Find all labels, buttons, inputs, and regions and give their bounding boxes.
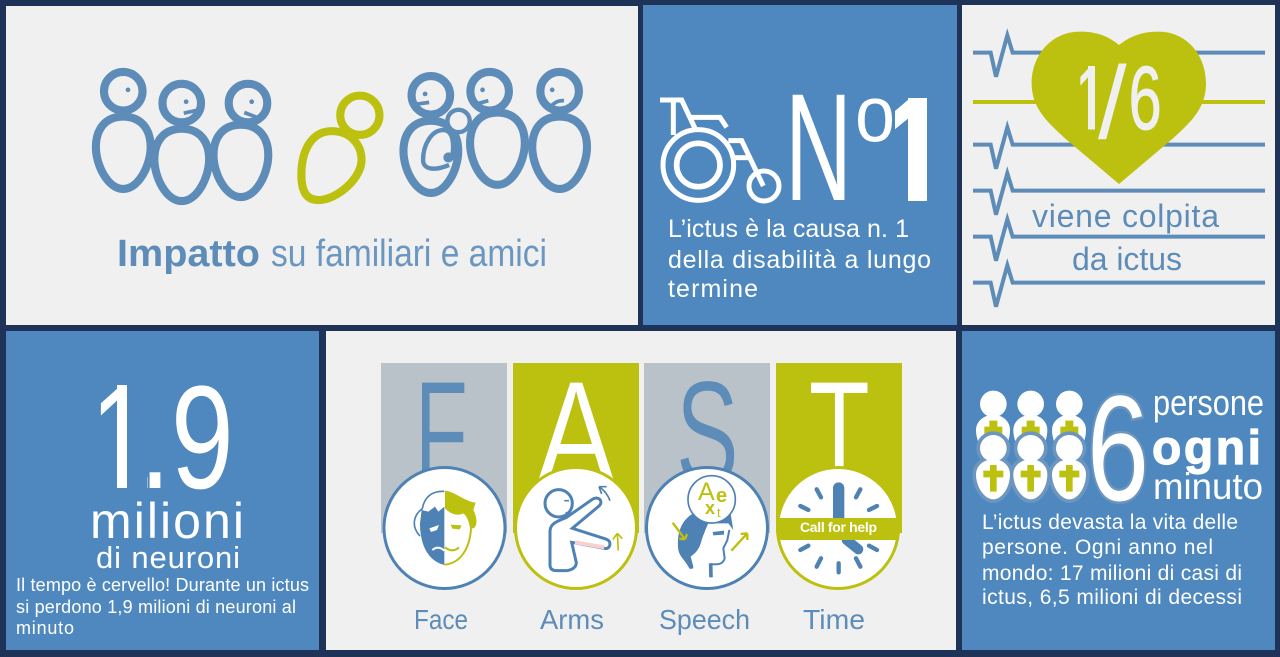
heading: Impatto su familiari e amici: su familiari e amici	[271, 233, 547, 275]
text: letters A e x t: e	[716, 485, 727, 507]
column: F Face	[381, 351, 507, 635]
text: paragraph about cases and deaths	[982, 511, 1242, 609]
text: persone ogni minuto	[1152, 382, 1264, 507]
icon: six people with crosses	[976, 391, 1086, 499]
panel: number one cause of disability	[643, 5, 957, 325]
text: neurons paragraph: si perdono 1,9 milioni di neuroni al	[16, 597, 296, 617]
text: neurons paragraph: minuto	[16, 618, 74, 638]
column: S Speech	[644, 351, 770, 635]
text: paragraph about cases and deaths: mondo: 17 milioni di casi di	[982, 562, 1242, 585]
text: letters A e x t	[698, 478, 727, 520]
text: disability description: della disabilità a lungo	[668, 246, 931, 274]
text: disability description	[668, 215, 931, 303]
column: S Speech: S	[676, 351, 739, 516]
text: 6: 6	[1087, 364, 1149, 532]
text: neurons paragraph: Il tempo è cervello! Durante un ictus	[16, 575, 309, 595]
banner: Call for help: Call for help	[800, 519, 877, 535]
text: letters A e x t: t	[717, 505, 721, 520]
column: T Time: T	[808, 351, 870, 516]
text: neurons paragraph	[16, 575, 309, 638]
column: F Face: F	[414, 351, 468, 516]
label: Arms: Arms	[540, 604, 604, 635]
text: paragraph about cases and deaths: L’ictus devasta la vita delle	[982, 511, 1238, 534]
chart icon: heartbeat lines	[973, 35, 1265, 307]
icon: raised arms	[545, 487, 622, 571]
heading: N° 1: 1	[883, 68, 945, 231]
text: paragraph about cases and deaths: persone. Ogni anno nel	[982, 536, 1213, 559]
text: milioni di neuroni	[90, 493, 244, 575]
text: disability description: L’ictus è la causa n. 1	[668, 215, 909, 243]
heading: Impatto su familiari e amici	[117, 233, 547, 275]
icon: group of people around the stroke patient	[96, 72, 587, 201]
panel: six people every minute	[962, 331, 1275, 650]
text: viene colpita da ictus	[1032, 198, 1219, 277]
icon: half sad, half smiling face	[414, 491, 476, 565]
panel: one in six	[962, 5, 1275, 325]
icon: clock	[800, 488, 877, 572]
text: viene colpita da ictus: da ictus	[1072, 241, 1182, 277]
panel: 1.9 million neurons	[6, 331, 319, 650]
text: 1/6: 1	[1075, 49, 1108, 149]
heading: Impatto su familiari e amici: Impatto	[117, 233, 260, 275]
text: disability description: termine	[668, 275, 758, 303]
text: paragraph about cases and deaths: ictus, 6,5 milioni di decessi	[982, 586, 1242, 609]
heading: N° 1: N	[785, 62, 852, 233]
text: persone ogni minuto: persone	[1153, 382, 1264, 423]
column: A Arms	[513, 351, 639, 635]
text: persone ogni minuto: minuto	[1153, 466, 1263, 507]
panel: FAST	[326, 331, 956, 650]
text: 1/6	[1068, 45, 1162, 160]
text: milioni di neuroni: di neuroni	[96, 540, 240, 575]
label: Time: Time	[803, 604, 865, 635]
icon: head with speech letters	[673, 476, 747, 577]
column: A Arms: A	[536, 351, 616, 516]
text: letters A e x t: A	[698, 478, 715, 506]
heading: N° 1	[785, 62, 956, 233]
text: 1.9: 1.9	[90, 355, 234, 519]
icon: wheelchair	[660, 100, 779, 201]
icon: heart	[1032, 32, 1206, 184]
banner: Call for help	[779, 518, 897, 540]
text: milioni di neuroni: milioni	[90, 493, 244, 549]
label: Speech: Speech	[659, 604, 750, 635]
text: 1/6: 6	[1129, 49, 1162, 149]
text: persone ogni minuto: ogni	[1152, 422, 1261, 475]
panel: impact on family and friends	[6, 6, 638, 325]
text: 1/6: /	[1098, 45, 1127, 160]
text: letters A e x t: x	[705, 498, 715, 518]
text: viene colpita da ictus: viene colpita	[1032, 198, 1219, 234]
label: Face: Face	[414, 604, 468, 635]
column: T Time	[776, 351, 902, 635]
heading: N° 1: o	[855, 69, 895, 158]
